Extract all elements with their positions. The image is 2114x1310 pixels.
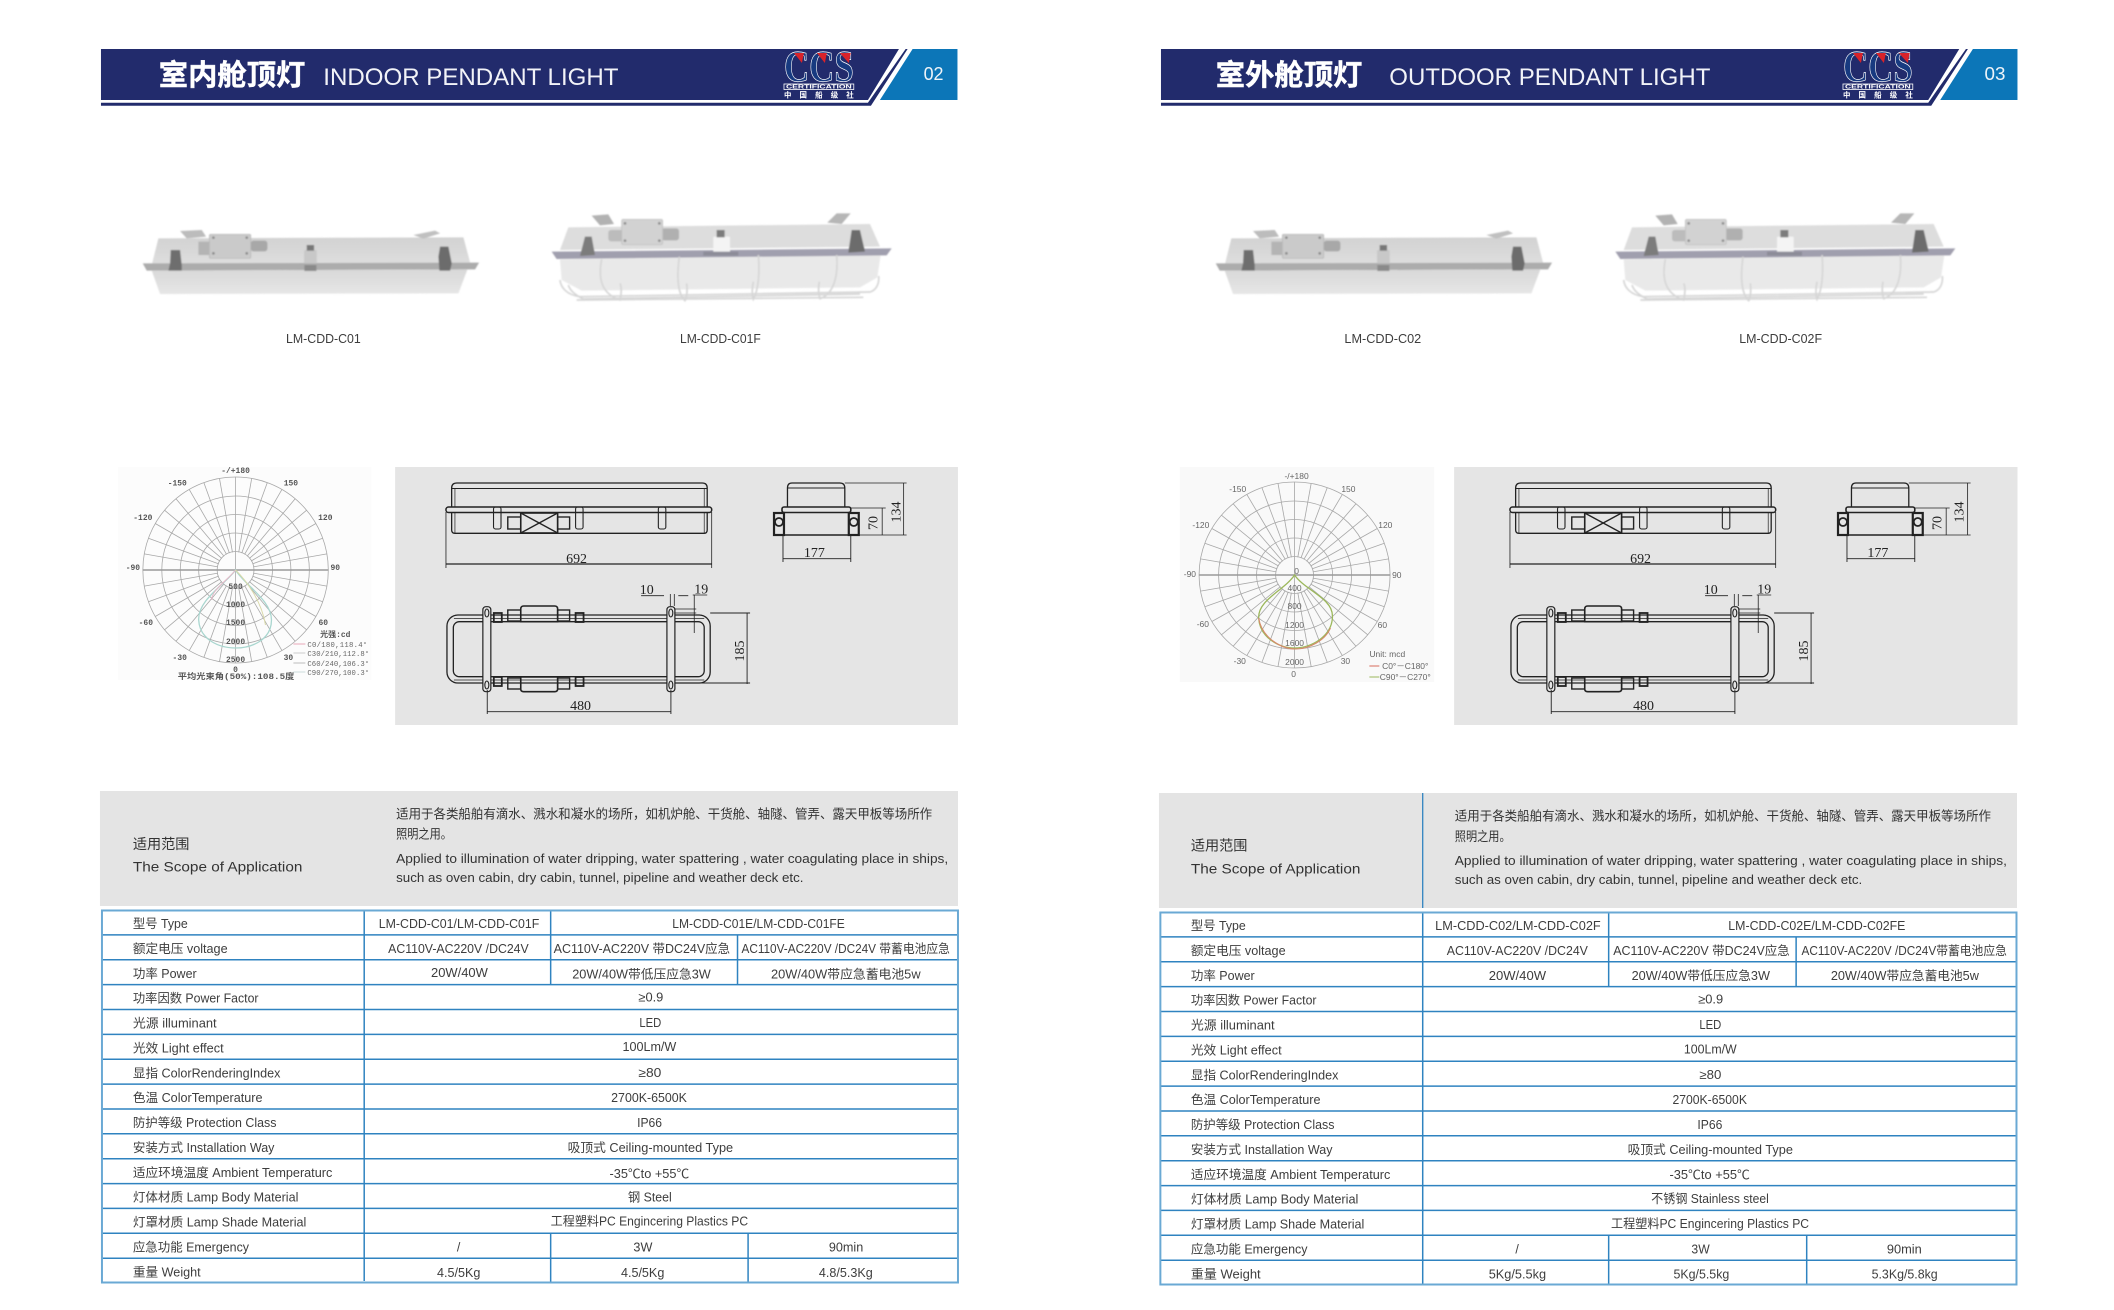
- panel: scope of application, indoor: The Scope of Application: [133, 859, 302, 876]
- icon: CCS certification logo: CCS: [784, 42, 854, 91]
- table: specifications, indoor: ≥80: [638, 1066, 661, 1080]
- left page: indoor pendant light: [100, 42, 958, 1283]
- icon: CCS certification logo: CCS: [1843, 42, 1913, 91]
- table: specifications, indoor: 应急功能 Emergency: [133, 1239, 250, 1254]
- table: specifications, indoor: IP66: [637, 1116, 662, 1130]
- table: specifications, outdoor: 光效 Light effect: [1191, 1042, 1282, 1058]
- product photo: LM-CDD-C01: [143, 230, 479, 294]
- table: specifications, indoor: -35℃to +55℃: [609, 1167, 689, 1181]
- panel: dimension drawings, indoor: 19: [694, 582, 708, 598]
- table: specifications, outdoor: [1160, 912, 2016, 1285]
- panel: scope of application, outdoor: 适用于各类船舶有滴水、溅水和凝水的场所，如机炉舱、干货舱、轴隧、管弄、露天甲板等场所作: [1455, 808, 1991, 824]
- icon: CCS certification logo: 中国船级社: [784, 89, 854, 100]
- table: specifications, outdoor: 3W: [1691, 1242, 1710, 1256]
- polar light distribution chart: outdoor: [1180, 467, 1434, 682]
- polar light distribution chart: outdoor: -90: [1184, 569, 1196, 579]
- page number: 03: [1985, 63, 2006, 84]
- polar light distribution chart: indoor: 1500: [226, 619, 245, 628]
- table: specifications, indoor: 20W/40W: [431, 966, 488, 980]
- table: specifications, outdoor: AC110V-AC220V /DC24V: [1447, 944, 1589, 958]
- polar light distribution chart: indoor: 120: [318, 514, 333, 523]
- panel: dimension drawings, indoor: 185: [733, 640, 748, 661]
- polar light distribution chart: outdoor: 2000: [1285, 657, 1304, 667]
- polar light distribution chart: outdoor: 0: [1294, 566, 1299, 576]
- panel: dimension drawings, outdoor: [1454, 467, 2017, 725]
- polar light distribution chart: outdoor: 30: [1341, 656, 1350, 666]
- table: specifications, indoor: 20W/40W带应急蓄电池5w: [771, 967, 922, 982]
- heading: Chinese title: 室外舱顶灯: [1216, 60, 1362, 92]
- table: specifications, outdoor: 应急功能 Emergency: [1191, 1241, 1308, 1256]
- table: specifications, indoor: AC110V-AC220V 带DC24V应急: [554, 941, 730, 956]
- panel: dimension drawings, outdoor: 480: [1633, 699, 1654, 714]
- panel: dimension drawings, indoor: 10: [640, 583, 654, 598]
- polar light distribution chart: outdoor: 90: [1392, 570, 1402, 580]
- polar light distribution chart: indoor: C30/210,112.8°: [307, 650, 369, 659]
- table: specifications, indoor: 工程塑料PC Engincering Plastics PC: [551, 1214, 748, 1229]
- polar light distribution chart: indoor: 90: [331, 564, 340, 573]
- table: specifications, outdoor: 色温 ColorTemperature: [1191, 1092, 1321, 1107]
- icon: CCS certification logo: CERTIFICATION: [786, 85, 852, 91]
- table: specifications, outdoor: 功率 Power: [1191, 968, 1255, 983]
- panel: dimension drawings, outdoor: 177: [1867, 546, 1888, 561]
- panel: scope of application, indoor: 适用范围: [133, 836, 189, 853]
- polar light distribution chart: outdoor: -30: [1234, 656, 1246, 666]
- table: specifications, outdoor: 不锈钢 Stainless steel: [1651, 1191, 1769, 1206]
- panel: scope of application, outdoor: 照明之用。: [1455, 829, 1511, 844]
- polar light distribution chart: outdoor: 60: [1378, 620, 1387, 630]
- polar light distribution chart: outdoor: 1600: [1285, 638, 1304, 648]
- polar light distribution chart: indoor: 光强:cd: [320, 629, 351, 640]
- table: specifications, outdoor: 灯罩材质 Lamp Shade Material: [1191, 1217, 1364, 1232]
- polar light distribution chart: indoor: [118, 467, 371, 682]
- table: specifications, outdoor: 20W/40W带低压应急3W: [1632, 968, 1770, 983]
- polar light distribution chart: indoor: C90/270,100.3°: [307, 669, 369, 678]
- icon: CCS certification logo: 中国船级社: [1843, 89, 1913, 100]
- table: specifications, outdoor: 100Lm/W: [1684, 1043, 1737, 1057]
- polar light distribution chart: indoor: -90: [126, 564, 140, 573]
- table: specifications, indoor: 2700K-6500K: [611, 1091, 688, 1105]
- table: specifications, indoor: 3W: [633, 1240, 653, 1254]
- panel: dimension drawings, indoor: 177: [804, 546, 825, 561]
- icon: CCS certification logo: CERTIFICATION: [1845, 85, 1911, 91]
- table: specifications, outdoor: 安装方式 Installation Way: [1191, 1142, 1333, 1157]
- panel: scope of application, outdoor: such as oven cabin, dry cabin, tunnel, pipeline and weather deck etc.: [1455, 872, 1862, 887]
- panel: scope of application, outdoor: The Scope of Application: [1191, 861, 1360, 878]
- polar light distribution chart: indoor: 0: [233, 666, 238, 675]
- panel: scope of application, indoor: 适用于各类船舶有滴水、溅水和凝水的场所，如机炉舱、干货舱、轴隧、管弄、露天甲板等场所作: [396, 806, 932, 822]
- product label: LM-CDD-C01: LM-CDD-C01: [286, 332, 361, 346]
- table: specifications, outdoor: 20W/40W: [1489, 969, 1546, 983]
- polar light distribution chart: outdoor: 120: [1378, 520, 1393, 530]
- table: specifications, outdoor: 光源 illuminant: [1191, 1019, 1275, 1033]
- table: specifications, outdoor: LM-CDD-C02E/LM-CDD-C02FE: [1728, 919, 1905, 933]
- polar light distribution chart: outdoor: C90°－C270°: [1380, 672, 1431, 682]
- table: specifications, outdoor: 20W/40W带应急蓄电池5w: [1831, 968, 1980, 983]
- polar light distribution chart: indoor: -/+180: [221, 467, 250, 476]
- table: specifications, indoor: 重量 Weight: [133, 1264, 201, 1279]
- table: specifications, outdoor: AC110V-AC220V 带DC24V应急: [1613, 943, 1790, 958]
- panel: dimension drawings, outdoor: 19: [1757, 582, 1771, 598]
- table: specifications, indoor: 功率 Power: [133, 966, 197, 981]
- table: specifications, outdoor: 5.3Kg/5.8kg: [1872, 1268, 1938, 1282]
- table: specifications, indoor: 型号 Type: [133, 917, 188, 931]
- table: specifications, outdoor: ≥80: [1699, 1068, 1721, 1082]
- heading: Chinese title: 室内舱顶灯: [159, 60, 305, 92]
- table: specifications, outdoor: LM-CDD-C02/LM-CDD-C02F: [1435, 919, 1601, 933]
- polar light distribution chart: indoor: 60: [319, 619, 328, 628]
- table: specifications, outdoor: 90min: [1887, 1242, 1922, 1256]
- panel: dimension drawings, indoor: [395, 467, 958, 725]
- panel: dimension drawings, outdoor: 10: [1704, 583, 1718, 598]
- polar light distribution chart: indoor: 平均光束角(50%):108.5度: [178, 671, 294, 682]
- panel: scope of application, indoor: Applied to illumination of water dripping, water spattering , water coagulating place in ships,: [396, 851, 948, 866]
- table: specifications, indoor: 吸顶式 Ceiling-mounted Type: [568, 1141, 733, 1155]
- panel: dimension drawings, indoor: 134: [890, 501, 905, 522]
- table: specifications, outdoor: 工程塑料PC Engincering Plastics PC: [1611, 1216, 1809, 1231]
- page number: 02: [924, 63, 944, 84]
- panel: dimension drawings, indoor: 70: [867, 516, 882, 530]
- panel: scope of application, indoor: [100, 791, 958, 906]
- polar light distribution chart: outdoor: 1200: [1285, 620, 1304, 630]
- table: specifications, indoor: 灯体材质 Lamp Body Material: [133, 1191, 298, 1205]
- polar light distribution chart: outdoor: -/+180: [1284, 471, 1309, 481]
- polar light distribution chart: indoor: C60/240,106.3°: [307, 660, 369, 669]
- header bar: outdoor: [1161, 42, 2017, 106]
- panel: dimension drawings, indoor: 480: [570, 699, 591, 714]
- panel: dimension drawings, outdoor: 70: [1931, 516, 1946, 530]
- polar light distribution chart: outdoor: -60: [1197, 619, 1209, 629]
- panel: scope of application, outdoor: [1159, 793, 2017, 908]
- panel: dimension drawings, outdoor: 692: [1630, 552, 1651, 567]
- table: specifications, indoor: 防护等级 Protection Class: [133, 1115, 276, 1130]
- table: specifications, indoor: 光效 Light effect: [133, 1040, 224, 1056]
- polar light distribution chart: indoor: 2500: [226, 656, 245, 665]
- table: specifications, indoor: 4.5/5Kg: [437, 1266, 480, 1280]
- table: specifications, outdoor: 适应环境温度 Ambient Temperaturc: [1191, 1167, 1390, 1182]
- polar light distribution chart: indoor: -60: [139, 619, 153, 628]
- table: specifications, indoor: 100Lm/W: [622, 1040, 677, 1054]
- table: specifications, outdoor: AC110V-AC220V /DC24V带蓄电池应急: [1802, 943, 2007, 958]
- table: specifications, indoor: AC110V-AC220V /DC24V: [388, 942, 529, 956]
- table: specifications, outdoor: 防护等级 Protection Class: [1191, 1117, 1334, 1132]
- polar light distribution chart: outdoor: 150: [1341, 484, 1356, 494]
- table: specifications, indoor: LM-CDD-C01E/LM-CDD-C01FE: [672, 917, 845, 931]
- polar light distribution chart: indoor: 30: [284, 654, 293, 663]
- polar light distribution chart: outdoor: Unit: mcd: [1369, 649, 1405, 659]
- panel: scope of application, indoor: such as oven cabin, dry cabin, tunnel, pipeline and weather deck etc.: [396, 870, 804, 885]
- product label: LM-CDD-C02F: LM-CDD-C02F: [1739, 332, 1822, 346]
- table: specifications, outdoor: LED: [1699, 1018, 1721, 1032]
- table: specifications, outdoor: -35℃to +55℃: [1669, 1168, 1750, 1182]
- table: specifications, indoor: 适应环境温度 Ambient Temperaturc: [133, 1165, 332, 1180]
- panel: dimension drawings, indoor: 692: [566, 552, 587, 567]
- table: specifications, indoor: 安装方式 Installation Way: [133, 1140, 275, 1155]
- table: specifications, indoor: 显指 ColorRenderingIndex: [133, 1065, 281, 1080]
- table: specifications, outdoor: 重量 Weight: [1191, 1266, 1261, 1281]
- table: specifications, indoor: AC110V-AC220V /DC24V 带蓄电池应急: [742, 941, 950, 956]
- panel: scope of application, indoor: 照明之用。: [396, 826, 452, 842]
- table: specifications, indoor: ≥0.9: [638, 991, 663, 1005]
- product photo: LM-CDD-C02F: [1615, 213, 1955, 301]
- panel: scope of application, outdoor: Applied to illumination of water dripping, water spattering , water coagulating place in ships,: [1455, 853, 2007, 868]
- panel: dimension drawings, outdoor: 134: [1953, 501, 1968, 522]
- polar light distribution chart: indoor: C0/180,118.4°: [307, 641, 367, 650]
- polar light distribution chart: indoor: 2000: [226, 638, 245, 647]
- table: specifications, indoor: 20W/40W带低压应急3W: [572, 967, 711, 982]
- table: specifications, outdoor: 吸顶式 Ceiling-mounted Type: [1628, 1143, 1793, 1157]
- table: specifications, indoor: 钢 Steel: [628, 1191, 672, 1205]
- table: specifications, indoor: 灯罩材质 Lamp Shade Material: [133, 1215, 306, 1230]
- table: specifications, outdoor: 5Kg/5.5kg: [1673, 1268, 1729, 1282]
- table: specifications, outdoor: 额定电压 voltage: [1191, 943, 1286, 958]
- polar light distribution chart: indoor: -120: [133, 514, 153, 523]
- polar light distribution chart: outdoor: -150: [1229, 484, 1246, 494]
- product label: LM-CDD-C01F: LM-CDD-C01F: [680, 332, 761, 346]
- table: specifications, indoor: LM-CDD-C01/LM-CDD-C01F: [379, 917, 540, 931]
- polar light distribution chart: indoor: 150: [284, 479, 298, 489]
- table: specifications, indoor: [102, 910, 958, 1283]
- header bar: indoor: [101, 42, 957, 106]
- table: specifications, indoor: 光源 illuminant: [133, 1017, 217, 1031]
- polar light distribution chart: outdoor: 0: [1291, 669, 1296, 679]
- table: specifications, indoor: 额定电压 voltage: [133, 941, 228, 956]
- table: specifications, indoor: 90min: [829, 1240, 863, 1254]
- table: specifications, outdoor: ≥0.9: [1698, 993, 1723, 1007]
- table: specifications, indoor: 4.5/5Kg: [621, 1266, 664, 1280]
- polar light distribution chart: indoor: -150: [168, 479, 187, 489]
- panel: scope of application, outdoor: 适用范围: [1191, 837, 1247, 855]
- table: specifications, indoor: 功率因数 Power Factor: [133, 991, 259, 1006]
- polar light distribution chart: indoor: -30: [173, 654, 187, 663]
- table: specifications, outdoor: 显指 ColorRenderingIndex: [1191, 1067, 1339, 1082]
- polar light distribution chart: outdoor: C0°－C180°: [1382, 661, 1428, 671]
- panel: dimension drawings, outdoor: 185: [1797, 640, 1812, 661]
- heading: English title: OUTDOOR PENDANT LIGHT: [1389, 64, 1711, 91]
- polar light distribution chart: outdoor: -120: [1192, 520, 1210, 530]
- table: specifications, outdoor: /: [1515, 1242, 1519, 1256]
- table: specifications, outdoor: 功率因数 Power Factor: [1191, 993, 1317, 1008]
- table: specifications, indoor: LED: [639, 1016, 661, 1030]
- table: specifications, indoor: 4.8/5.3Kg: [819, 1266, 873, 1280]
- right page: outdoor pendant light: [1159, 42, 2017, 1285]
- table: specifications, outdoor: IP66: [1697, 1118, 1722, 1132]
- product photo: LM-CDD-C01F: [552, 213, 892, 301]
- product label: LM-CDD-C02: LM-CDD-C02: [1344, 332, 1421, 346]
- table: specifications, outdoor: 灯体材质 Lamp Body Material: [1191, 1193, 1358, 1207]
- polar light distribution chart: indoor: 500: [228, 583, 243, 592]
- polar light distribution chart: outdoor: 400: [1288, 583, 1302, 593]
- product photo: LM-CDD-C02: [1216, 230, 1552, 294]
- table: specifications, indoor: /: [457, 1240, 461, 1254]
- polar light distribution chart: outdoor: 800: [1288, 601, 1302, 611]
- table: specifications, outdoor: 型号 Type: [1191, 919, 1246, 933]
- heading: English title: INDOOR PENDANT LIGHT: [323, 64, 619, 91]
- polar light distribution chart: indoor: 1000: [226, 601, 245, 610]
- table: specifications, indoor: 色温 ColorTemperature: [133, 1090, 263, 1105]
- table: specifications, outdoor: 5Kg/5.5kg: [1489, 1268, 1546, 1282]
- table: specifications, outdoor: 2700K-6500K: [1672, 1093, 1748, 1107]
